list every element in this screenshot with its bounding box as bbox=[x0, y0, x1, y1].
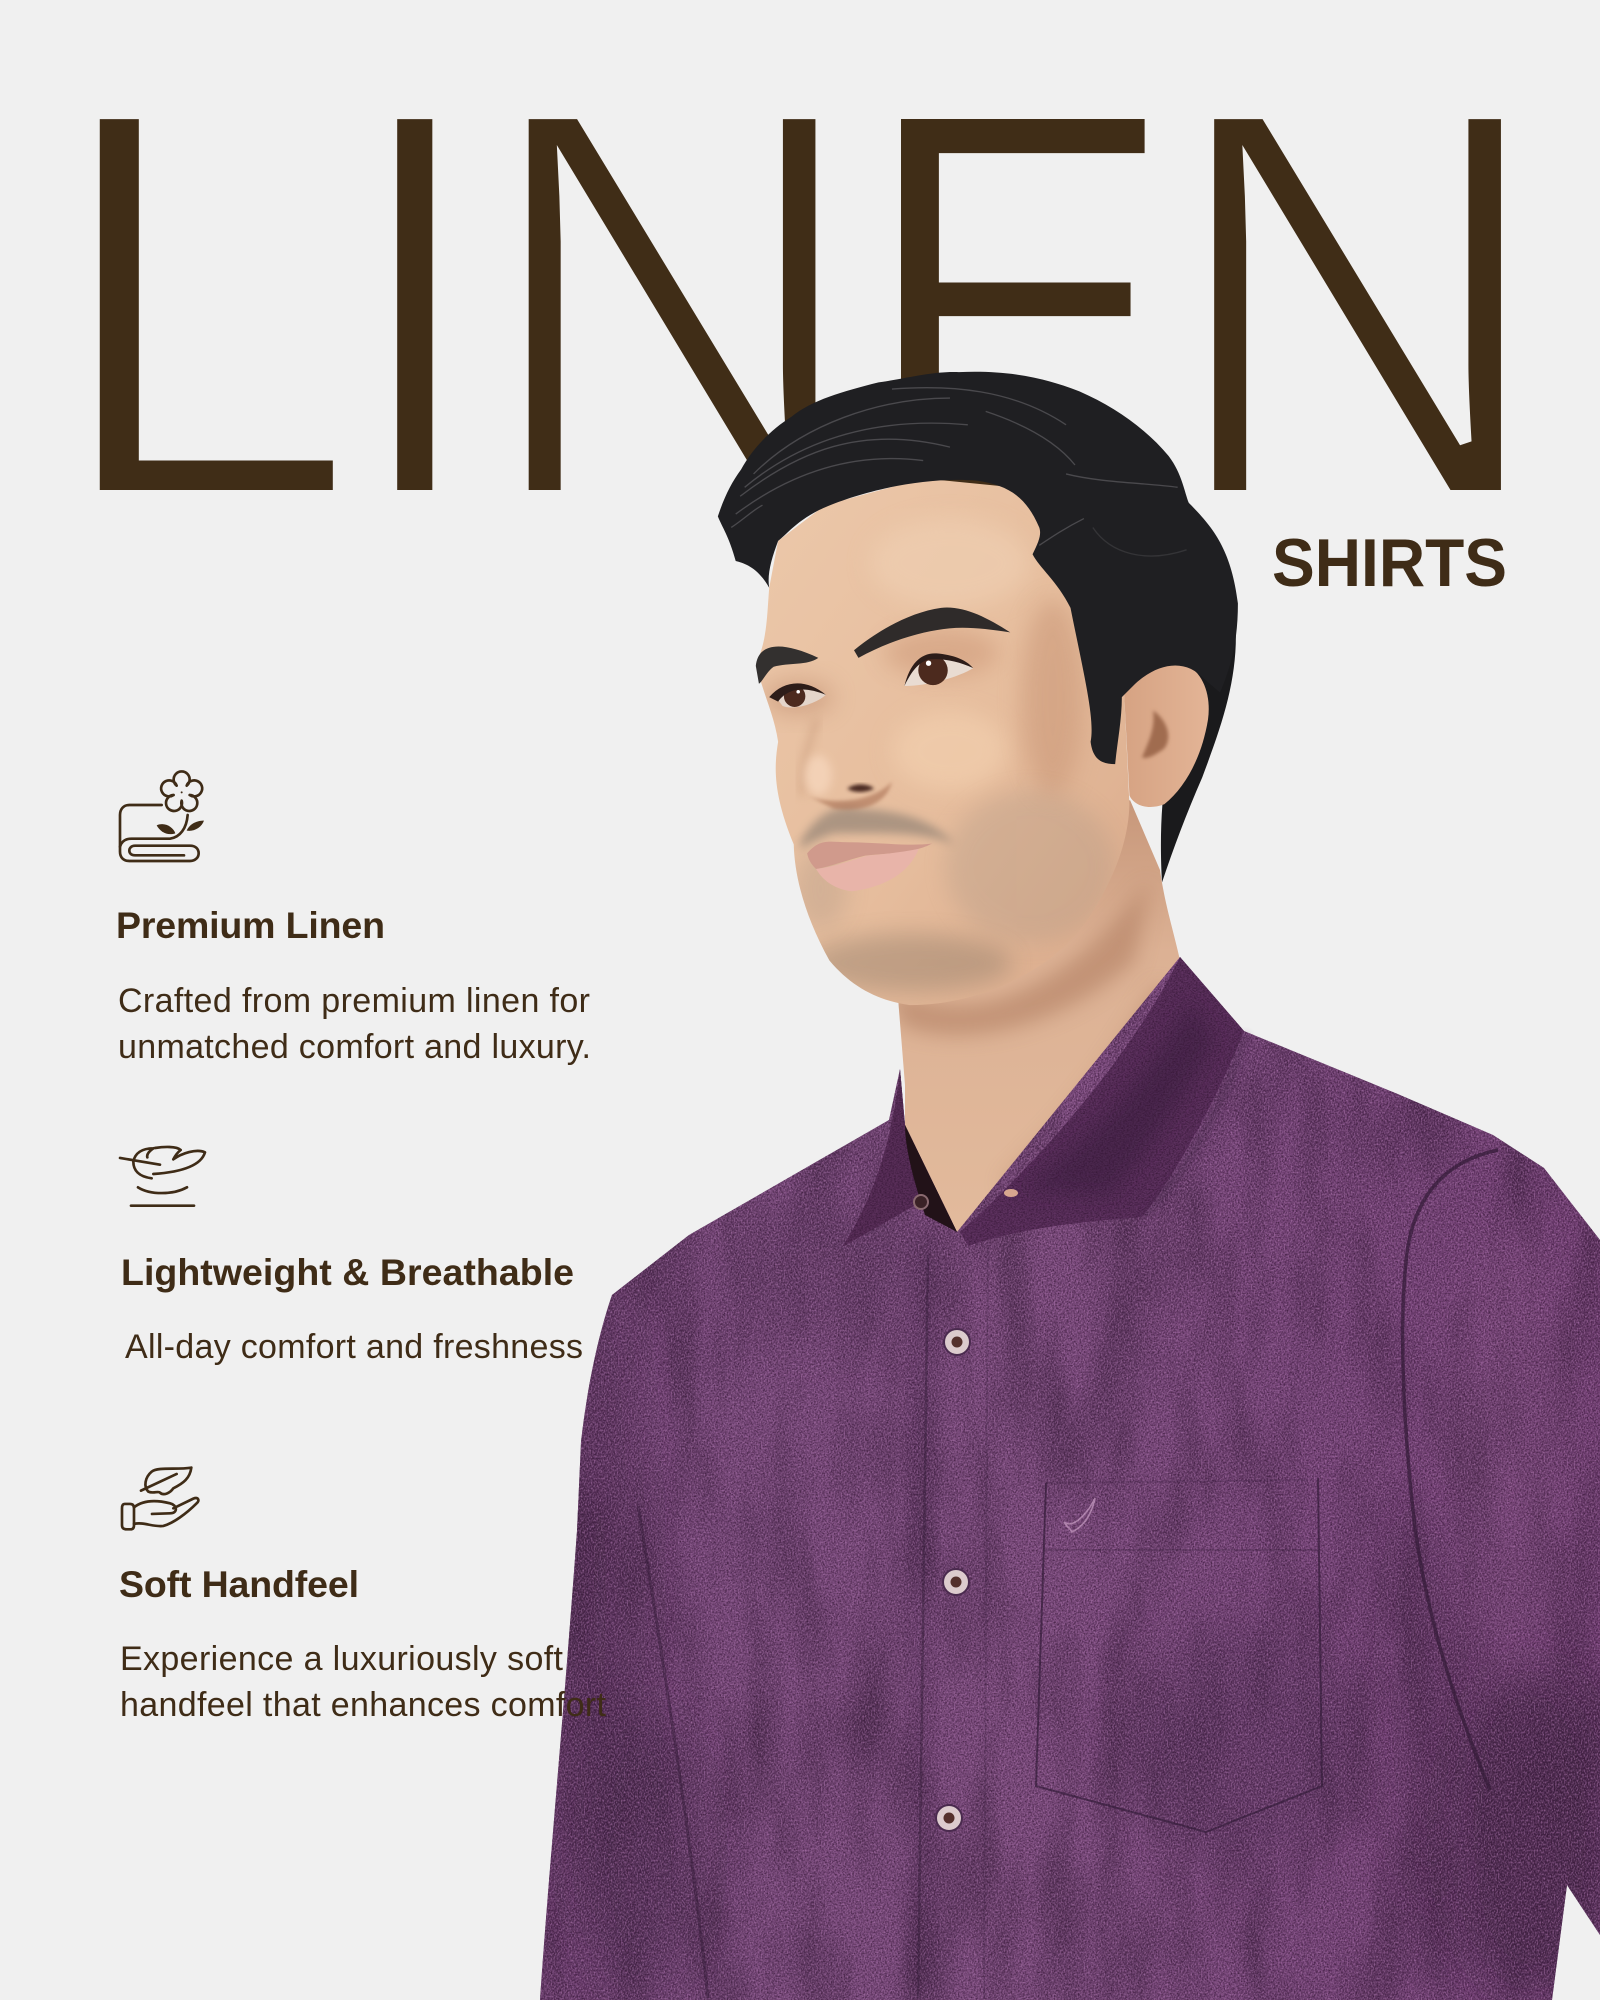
icon: hand with leaf bbox=[122, 1468, 198, 1529]
icon: towel and flower bbox=[120, 771, 204, 861]
title: LINEN: I bbox=[345, 0, 485, 615]
left eyebrow bbox=[756, 646, 818, 684]
collar texture and shadow bbox=[840, 950, 1250, 1250]
embroidered logo bbox=[1064, 1498, 1095, 1532]
title: LINEN: N bbox=[478, 0, 865, 615]
heading: Soft Handfeel: Soft Handfeel bbox=[119, 1563, 359, 1605]
description: Experience a luxuriously soft bbox=[120, 1640, 564, 1678]
facial shading bbox=[762, 519, 1115, 992]
feature 3: soft handfeel bbox=[119, 1468, 607, 1724]
description: unmatched comfort and luxury. bbox=[118, 1028, 591, 1066]
right eye bbox=[904, 653, 973, 686]
neck bbox=[897, 800, 1180, 1232]
sleeve and placket seams bbox=[638, 1150, 1498, 1998]
description: All-day comfort and freshness bbox=[125, 1328, 583, 1366]
lower lip bbox=[816, 849, 919, 891]
moustache bbox=[800, 807, 954, 849]
collar buttons bbox=[914, 1189, 1018, 1209]
head bbox=[718, 372, 1238, 1005]
heading: Lightweight & Breathable: Lightweight & Breathable bbox=[121, 1251, 574, 1293]
model photo illustration bbox=[520, 372, 1600, 2000]
heading: Premium Linen: Premium Linen bbox=[116, 904, 385, 946]
description bbox=[118, 982, 591, 1066]
collar: right bbox=[960, 957, 1244, 1246]
title: LINEN: L bbox=[48, 0, 358, 616]
neck shadow under jaw bbox=[898, 894, 1155, 1170]
hair bbox=[718, 372, 1238, 764]
feature 1: premium linen bbox=[116, 771, 591, 1066]
collar inner shadow bbox=[905, 1125, 957, 1232]
left eye bbox=[769, 683, 826, 707]
back hair bbox=[1161, 626, 1236, 882]
upper lip bbox=[807, 842, 932, 869]
title: LINEN: E bbox=[858, 0, 1178, 611]
icon: feather bbox=[120, 1147, 205, 1206]
button holes bbox=[944, 1336, 962, 1824]
inner ear bbox=[1142, 711, 1168, 758]
face skin bbox=[757, 478, 1129, 1005]
lower nose shadow bbox=[807, 782, 892, 810]
description: Crafted from premium linen for bbox=[118, 982, 590, 1020]
description: handfeel that enhances comfort bbox=[120, 1686, 607, 1724]
collar edge shadow on shirt bbox=[1142, 1034, 1246, 1219]
chest pocket bbox=[1036, 1478, 1322, 1832]
feature 2: lightweight bbox=[120, 1147, 583, 1366]
nose highlight bbox=[805, 755, 832, 795]
nostril bbox=[847, 784, 874, 792]
shirt body bbox=[520, 940, 1600, 2000]
ear bbox=[1124, 663, 1209, 807]
collar: left bbox=[842, 1069, 957, 1247]
title: LINEN bbox=[48, 0, 1551, 616]
title: LINEN: N bbox=[1164, 0, 1551, 615]
description bbox=[120, 1640, 607, 1724]
right eyebrow bbox=[854, 608, 1010, 658]
hair highlights bbox=[731, 388, 1187, 556]
title: SHIRTS: SHIRTS bbox=[1272, 525, 1507, 601]
shirt buttons bbox=[936, 1329, 970, 1831]
